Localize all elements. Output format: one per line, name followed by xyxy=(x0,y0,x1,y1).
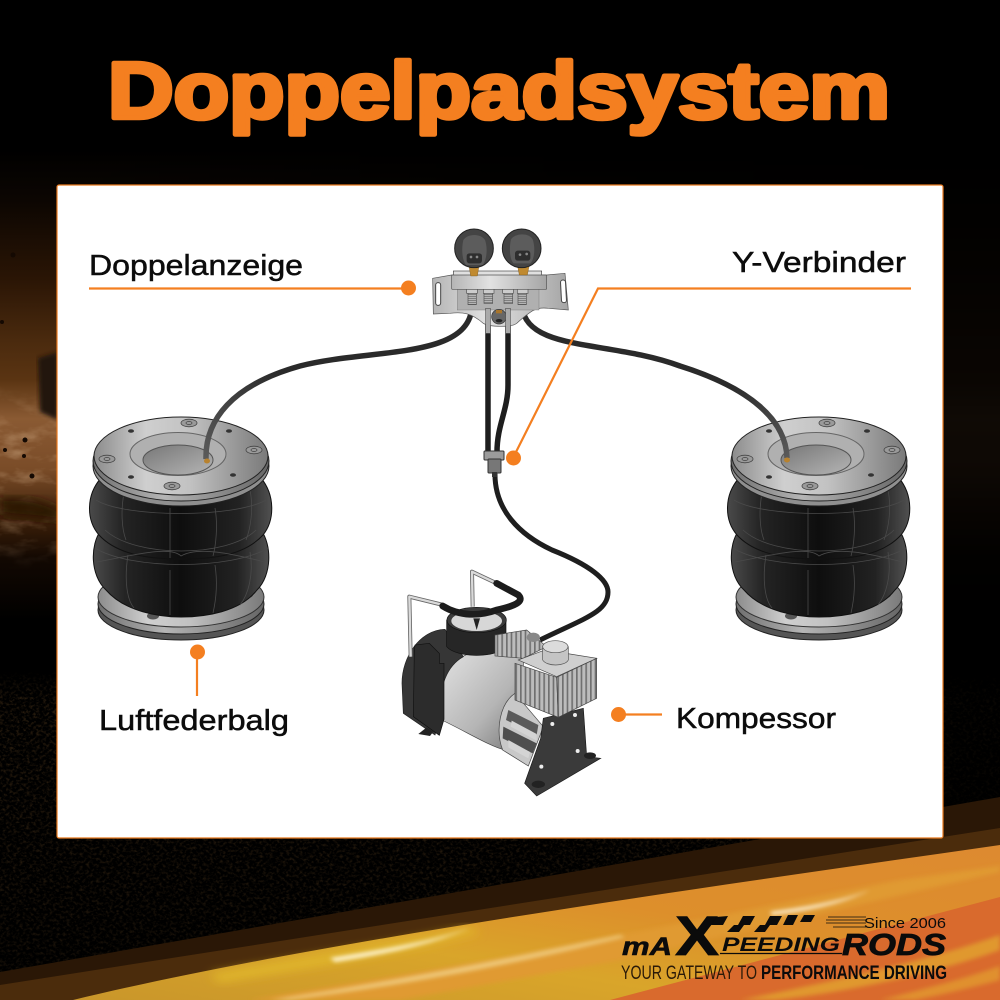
leader line xyxy=(89,287,408,290)
label text: Kompessor xyxy=(676,703,836,735)
brand logo: PEEDING xyxy=(722,935,840,956)
hose: right gauge to right air spring xyxy=(522,306,787,458)
bottom diagonal orange swoosh xyxy=(0,797,1000,1000)
fan grille xyxy=(499,693,543,766)
mounting bracket xyxy=(433,273,568,326)
tagline: YOUR GATEWAY TO xyxy=(621,963,757,984)
label text: Y-Verbinder xyxy=(732,247,906,279)
leader line xyxy=(618,713,662,716)
switch housing xyxy=(413,643,444,735)
background: dark photo with warm dust xyxy=(0,184,1000,972)
brand logo: RODS xyxy=(842,927,946,962)
label text: Luftfederbalg xyxy=(99,705,289,737)
compressor xyxy=(402,572,601,796)
mounting slots xyxy=(436,280,567,305)
cylinder head cap xyxy=(543,641,568,665)
brand logo: PERFORMANCE DRIVING xyxy=(761,963,947,984)
leader dot xyxy=(401,280,416,296)
leader dot xyxy=(190,644,205,660)
gauge housing xyxy=(447,620,506,655)
dual gauge manifold xyxy=(433,229,568,333)
callout: Luftfederbalg xyxy=(99,644,289,737)
gauge: left xyxy=(455,229,493,268)
callout: Doppelanzeige xyxy=(89,250,416,296)
callout: Y-Verbinder xyxy=(506,247,911,466)
brand logo: X xyxy=(675,904,719,967)
brass port: left spring xyxy=(204,458,210,464)
hose fittings xyxy=(467,289,528,305)
checkered flag marks xyxy=(711,915,815,932)
leader line xyxy=(196,652,198,696)
panel: white diagram card xyxy=(57,185,943,838)
gauge: right xyxy=(502,229,541,268)
brass stems xyxy=(469,265,529,276)
main cooling fins xyxy=(515,650,597,717)
rear cooling fins xyxy=(495,630,547,658)
silver motor body xyxy=(438,650,523,750)
air spring: right xyxy=(727,417,910,640)
callout: Kompessor xyxy=(611,703,836,735)
since text: Since 2006 xyxy=(864,915,946,932)
leader dot xyxy=(611,707,626,722)
carry handle wire xyxy=(409,572,497,657)
brass port: right spring xyxy=(784,458,790,462)
label text: Doppelanzeige xyxy=(89,250,303,282)
brand logo xyxy=(621,904,947,984)
hose: left gauge to left air spring xyxy=(206,306,472,459)
air spring: left xyxy=(89,417,272,640)
Y connector fitting xyxy=(484,451,504,477)
hose: Y connector to compressor xyxy=(495,472,608,640)
title: Doppelpadsystem xyxy=(108,46,890,135)
rear end cap xyxy=(402,629,463,735)
leader dot xyxy=(506,450,521,466)
speed lines xyxy=(826,917,866,927)
leader line xyxy=(513,288,911,458)
centre fitting xyxy=(486,308,510,333)
wordmark: mA xyxy=(622,933,672,961)
carry handle grip xyxy=(443,583,520,614)
stand xyxy=(525,708,601,796)
hoses: Y branches to manifold xyxy=(488,320,508,452)
manifold bar xyxy=(452,275,547,289)
